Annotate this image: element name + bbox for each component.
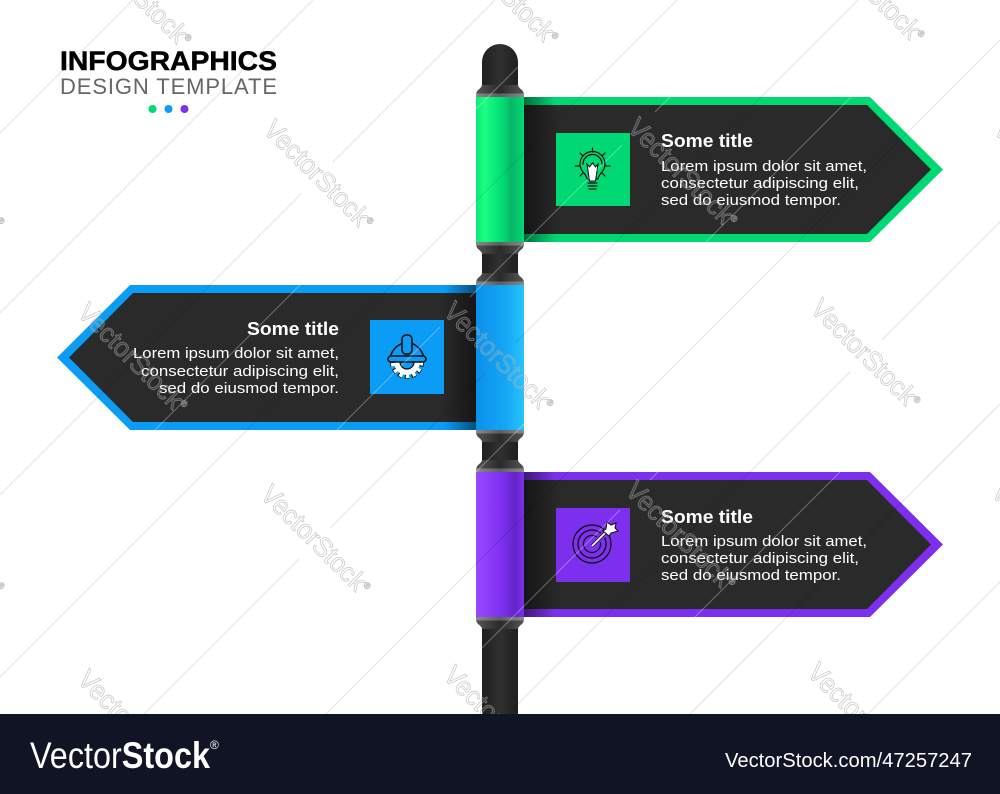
watermarks: VectorStock <box>620 475 743 598</box>
sign text: consectetur adipiscing elit, <box>661 551 859 567</box>
watermarks: ® <box>728 213 740 225</box>
green sleeve <box>476 97 524 242</box>
sign border <box>57 285 476 430</box>
footer bar <box>0 714 1000 794</box>
sign text: sed do eiusmod tempor. <box>159 381 339 397</box>
watermarks: VectorStock <box>438 296 561 419</box>
panel: purple sign <box>524 472 943 617</box>
watermarks: VectorStock <box>255 479 378 602</box>
purple sleeve <box>476 472 524 617</box>
subheading: DESIGN TEMPLATE <box>60 74 277 99</box>
watermarks: ® <box>364 215 376 227</box>
sign text <box>661 534 867 584</box>
sign text: sed do eiusmod tempor. <box>661 568 841 584</box>
sign title: Some title <box>247 319 339 339</box>
watermarks: ® <box>544 761 556 773</box>
watermarks: VectorStock <box>72 664 195 787</box>
sign body <box>524 105 931 234</box>
icon tile: helmet and gear <box>370 320 444 394</box>
collars and sleeves <box>476 85 524 629</box>
icon tile: light bulb <box>556 133 630 206</box>
watermarks: ® <box>911 394 923 406</box>
panel: green sign <box>524 97 943 242</box>
sign title: Some title <box>661 131 753 151</box>
sign text: Lorem ipsum dolor sit amet, <box>661 159 867 175</box>
sign border <box>524 472 943 617</box>
title block <box>60 46 277 113</box>
watermarks: ® <box>908 758 920 770</box>
watermarks: VectorStock <box>802 657 925 780</box>
watermarks: VectorStock <box>622 112 745 235</box>
watermarks: VectorStock <box>805 293 928 416</box>
watermarks: ® <box>915 28 927 40</box>
watermarks: ® <box>182 32 194 44</box>
watermarks: ® <box>178 398 190 410</box>
sign body <box>524 480 931 609</box>
footer logo: VectorStock <box>30 735 210 776</box>
sign text: consectetur adipiscing elit, <box>141 364 339 380</box>
sign body <box>69 293 476 422</box>
sign text: consectetur adipiscing elit, <box>661 176 859 192</box>
watermarks: ® <box>544 397 556 409</box>
sign text: sed do eiusmod tempor. <box>661 193 841 209</box>
watermarks: VectorStock <box>438 660 561 783</box>
watermarks: ® <box>549 30 561 42</box>
footer url: VectorStock.com/47257247 <box>725 750 972 772</box>
icon tile: target with dart <box>556 508 630 582</box>
sign border <box>524 97 943 242</box>
sign title: Some title <box>661 507 753 527</box>
sign text <box>661 159 867 209</box>
sign text: Lorem ipsum dolor sit amet, <box>133 346 339 362</box>
sign text: Lorem ipsum dolor sit amet, <box>661 534 867 550</box>
heading: INFOGRAPHICS <box>60 46 277 76</box>
registered mark: ® <box>210 738 219 752</box>
pole <box>482 44 518 714</box>
watermarks: VectorStock <box>72 297 195 420</box>
watermarks: ® <box>361 580 373 592</box>
sign text <box>133 346 339 397</box>
watermarks: ® <box>178 765 190 777</box>
blue sleeve <box>476 285 524 430</box>
panel: blue sign <box>57 285 476 430</box>
watermarks: VectorStock <box>258 114 381 237</box>
watermarks: ® <box>726 576 738 588</box>
colour dots <box>148 105 188 113</box>
